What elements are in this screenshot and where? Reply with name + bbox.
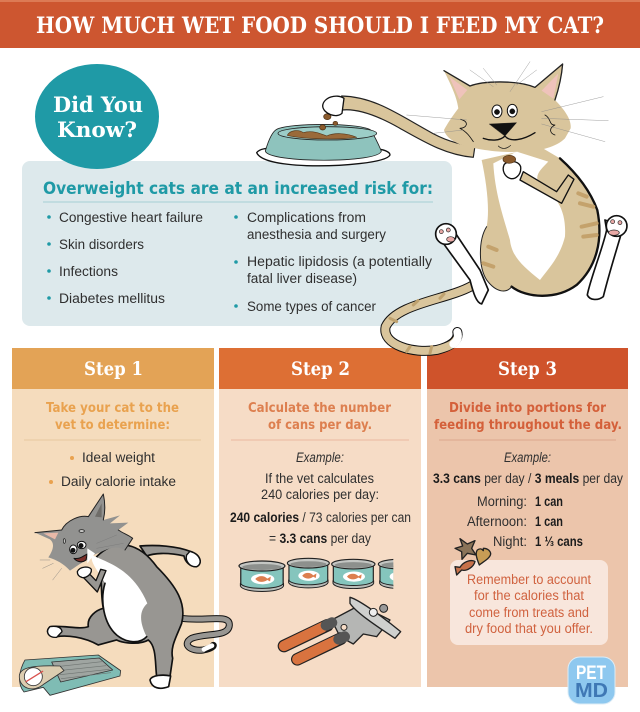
falling kibble bbox=[320, 114, 338, 130]
title banner bbox=[0, 0, 640, 48]
logo: PetMD: MD bbox=[575, 680, 608, 702]
step 3 instruction: feeding throughout the day. bbox=[434, 418, 622, 433]
treats reminder callout bbox=[450, 560, 608, 645]
risk list: left column: Skin disorders bbox=[59, 237, 144, 252]
step 3 example: Example: bbox=[504, 450, 551, 465]
step 2 instruction: Calculate the number bbox=[248, 401, 392, 416]
step 3 example: 3.3 cans per day / 3 meals per day bbox=[433, 471, 623, 486]
head bbox=[35, 494, 133, 571]
reaching arm bbox=[342, 96, 475, 157]
risk list: right column: anesthesia and surgery bbox=[247, 227, 386, 242]
risk list: left column: Infections bbox=[59, 264, 118, 279]
step 1 instruction: vet to determine: bbox=[55, 418, 170, 433]
did you know badge bbox=[35, 64, 159, 169]
step 2 example bbox=[230, 450, 411, 546]
risk list: left column: Diabetes mellitus bbox=[59, 291, 165, 306]
step 3 example: 1 ⅓ cans bbox=[535, 534, 583, 549]
risk list: left column: Congestive heart failure bbox=[59, 210, 203, 225]
arm and paw bbox=[83, 569, 106, 592]
step 2 example: Example: bbox=[296, 450, 344, 465]
illustration: grey cat on scale bbox=[19, 494, 229, 695]
treats reminder callout: dry food that you offer. bbox=[465, 621, 593, 636]
treats reminder callout: Remember to account bbox=[467, 572, 591, 587]
bowl bbox=[257, 124, 390, 166]
step 2 header: Step 2 bbox=[291, 358, 350, 380]
head bbox=[444, 64, 571, 152]
risk list: right column: Hepatic lipidosis (a potentially bbox=[247, 254, 432, 269]
step 3 example bbox=[433, 450, 623, 549]
panel: step 2 bbox=[219, 348, 421, 687]
logo: PetMD bbox=[568, 657, 615, 704]
scale bbox=[19, 655, 121, 695]
panel: step 3 bbox=[427, 348, 628, 687]
step 2 example: If the vet calculates bbox=[265, 471, 374, 486]
step 3 instruction bbox=[434, 401, 622, 433]
belly bbox=[91, 555, 147, 642]
treats reminder callout: come from treats and bbox=[469, 605, 589, 620]
logo: PetMD: PET bbox=[576, 663, 606, 684]
left leg bbox=[443, 230, 488, 304]
panel: risk information bbox=[22, 161, 452, 326]
risk list: right column: Some types of cancer bbox=[247, 299, 376, 314]
risk list: right column: fatal liver disease) bbox=[247, 271, 357, 286]
body bbox=[48, 545, 183, 677]
step 2 example: = 3.3 cans per day bbox=[269, 531, 371, 546]
face bbox=[63, 530, 95, 563]
step 3 header: Step 3 bbox=[498, 358, 557, 380]
step 1 instruction: Take your cat to the bbox=[46, 401, 179, 416]
step 3 header bbox=[427, 348, 628, 389]
whiskers bbox=[40, 535, 123, 580]
feet bbox=[48, 626, 62, 637]
risk heading: Overweight cats are at an increased risk for: bbox=[43, 179, 433, 198]
face bbox=[460, 104, 555, 148]
step 1 instruction bbox=[46, 401, 179, 433]
step 2 instruction: of cans per day. bbox=[268, 418, 372, 433]
step 2 example: 240 calories per day: bbox=[261, 487, 379, 502]
step 1 header bbox=[12, 348, 214, 389]
did you know badge: Know? bbox=[57, 117, 137, 142]
step 1 list: Ideal weight bbox=[82, 450, 155, 465]
back arm bbox=[140, 546, 200, 567]
cans bbox=[238, 558, 394, 592]
whiskers bbox=[407, 62, 608, 142]
step 1 list: Daily calorie intake bbox=[61, 474, 176, 489]
front arm with kibble bbox=[520, 172, 574, 203]
tail bbox=[385, 286, 472, 353]
risk list: left column bbox=[47, 210, 203, 306]
step 3 instruction: Divide into portions for bbox=[449, 401, 607, 416]
icon: treats bbox=[455, 539, 491, 575]
step 2 instruction bbox=[248, 401, 392, 433]
did you know badge: Did You bbox=[53, 92, 143, 117]
risk list: right column: Complications from bbox=[247, 210, 366, 225]
tabby marks bbox=[483, 193, 597, 267]
step 2 header bbox=[219, 348, 421, 389]
risk list: right column bbox=[234, 210, 432, 314]
body bbox=[480, 147, 599, 296]
illustration: cans and can opener bbox=[239, 558, 422, 659]
step 3 example: Morning: bbox=[477, 494, 527, 509]
can opener bbox=[284, 597, 401, 659]
illustration: food bowl and tan cat bbox=[257, 62, 627, 353]
panel: step 1 bbox=[12, 348, 214, 687]
step 3 example: 1 can bbox=[535, 514, 563, 529]
belly bbox=[493, 152, 565, 280]
step 1 header: Step 1 bbox=[84, 358, 143, 380]
treats reminder callout: for the calories that bbox=[474, 588, 584, 603]
step 3 example: Night: bbox=[493, 534, 527, 549]
right leg bbox=[587, 220, 623, 299]
step 1 list bbox=[49, 450, 176, 489]
step 3 example: Afternoon: bbox=[467, 514, 527, 529]
step 3 example: 1 can bbox=[535, 494, 563, 509]
tail bbox=[182, 618, 229, 650]
step 2 example: 240 calories / 73 calories per can bbox=[230, 510, 411, 525]
